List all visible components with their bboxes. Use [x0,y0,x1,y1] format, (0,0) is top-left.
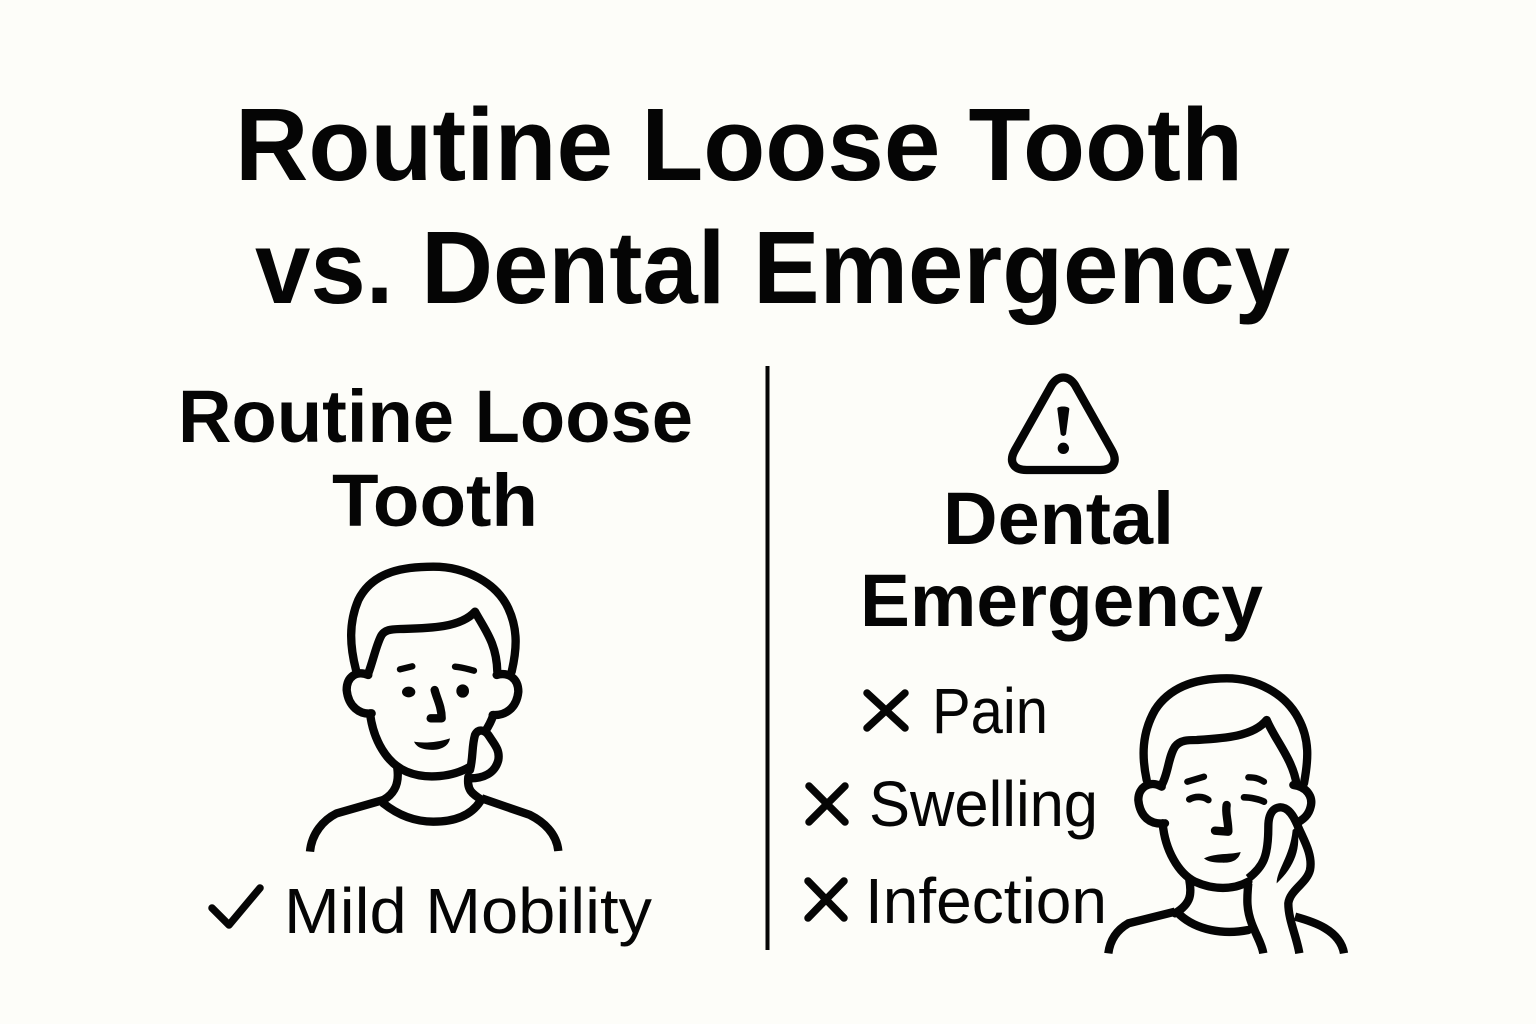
heading: routine loose tooth: Routine Loose [178,375,693,458]
item: pain: Pain [932,675,1048,747]
heading: routine loose tooth: Tooth [332,459,538,542]
divider [766,366,770,950]
item: swelling: Swelling [869,768,1098,840]
panel: routine loose tooth [178,375,693,947]
item: pain [867,675,1048,747]
icon: person in pain holding cheek [1108,678,1344,953]
title: Routine Loose Tooth [235,87,1243,202]
heading: dental emergency [860,477,1263,642]
icon: check mark [212,888,260,925]
heading: dental emergency: Dental [943,477,1174,560]
item: infection: Infection [865,865,1107,937]
panel: dental emergency [808,377,1344,953]
title: vs. Dental Emergency [255,210,1290,325]
heading: dental emergency: Emergency [860,559,1263,642]
icon: calm person with mild swelling [310,567,558,852]
title [235,87,1290,325]
item: mild mobility: Mild Mobility [284,875,652,947]
icon: warning triangle [1012,377,1115,470]
heading: routine loose tooth [178,375,693,542]
